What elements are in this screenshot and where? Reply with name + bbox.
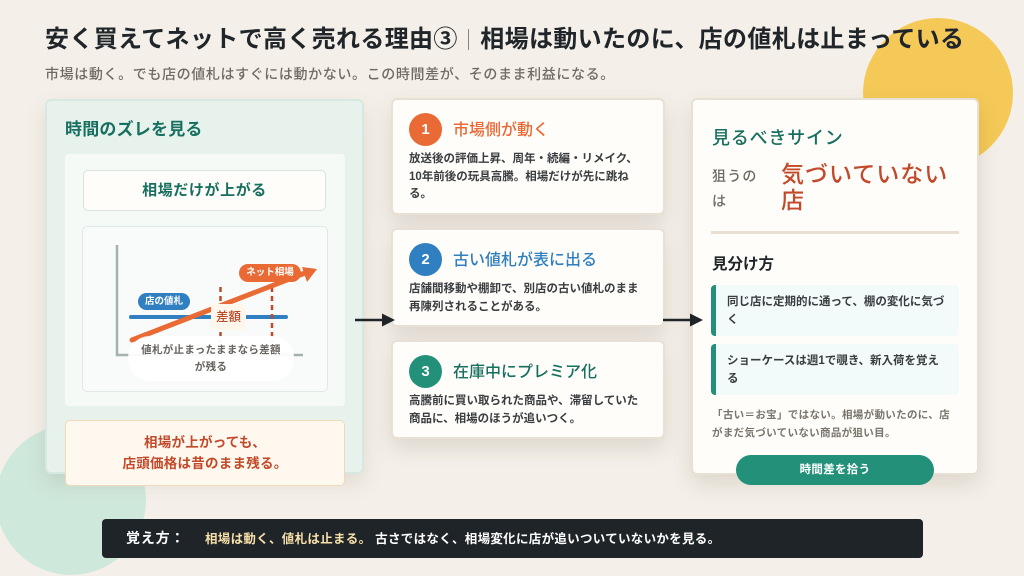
title: 安く買えてネットで高く売れる理由③ 相場は動いたのに、店の値札は止まっている bbox=[45, 26, 964, 53]
step 3 text bbox=[409, 394, 638, 424]
tip 2 text bbox=[727, 354, 939, 384]
step 2 text bbox=[409, 282, 639, 312]
card: step 2 bbox=[391, 228, 665, 327]
tip 1 text bbox=[727, 295, 944, 326]
bar message: 相場は動く、値札は止まる。 古さではなく、相場変化に店が追いついていないかを見る。 bbox=[205, 532, 720, 546]
target value: 気づいていない bbox=[781, 161, 948, 187]
number 1: 1 bbox=[421, 121, 430, 138]
step 3 text: 高騰前に買い取られた商品や、滞留していた bbox=[409, 395, 638, 407]
step 2 heading: 古い値札が表に出る bbox=[453, 252, 597, 269]
note: がまだ気づいていない商品が狙い目。 bbox=[712, 427, 896, 439]
gap dashed lines bbox=[220, 287, 272, 342]
gap label: 差額 bbox=[216, 310, 241, 324]
target label: 狙うの bbox=[712, 168, 758, 184]
callout: 店頭価格は昔のまま残る。 bbox=[122, 456, 288, 471]
number 3: 3 bbox=[421, 363, 430, 380]
pill: shop price: 店の値札 bbox=[145, 296, 183, 307]
step 1 text: 放送後の評価上昇、周年・続編・リメイク、 bbox=[409, 153, 638, 165]
subtitle: 市場は動く。でも店の値札はすぐには動かない。この時間差が、そのまま利益になる。 bbox=[45, 66, 615, 82]
panel: signs bbox=[691, 98, 979, 475]
shop price line bbox=[131, 315, 286, 319]
number 3 bbox=[409, 355, 442, 388]
target label: は bbox=[712, 193, 727, 209]
chart card bbox=[82, 226, 328, 392]
divider bbox=[711, 231, 959, 234]
decorative circle: green bbox=[0, 425, 146, 575]
step 1 heading: 市場側が動く bbox=[453, 122, 549, 139]
pill: shop price bbox=[138, 293, 190, 310]
market price arrow bbox=[132, 267, 317, 340]
how to spot heading: 見分け方 bbox=[712, 256, 774, 273]
label: market only rises: 相場だけが上がる bbox=[142, 182, 267, 199]
step 3 heading: 在庫中にプレミア化 bbox=[453, 364, 597, 381]
step 1 text: 10年前後の玩具高騰。相場だけが先に跳ね bbox=[409, 170, 629, 182]
chart caption bbox=[128, 336, 294, 381]
panel: time gap bbox=[45, 99, 364, 474]
callout: 相場が上がっても、 bbox=[144, 435, 266, 450]
button: 時間差を拾う bbox=[800, 464, 870, 476]
bottom bar bbox=[102, 519, 923, 558]
step 2 text: 店舗間移動や棚卸で、別店の古い値札のまま bbox=[409, 283, 639, 295]
chart caption: 値札が止まったままなら差額 bbox=[141, 344, 281, 356]
card: step 3 bbox=[391, 340, 665, 439]
step 1 text: る。 bbox=[409, 188, 432, 200]
decorative circle: yellow bbox=[863, 18, 1013, 168]
step 1 text bbox=[409, 152, 638, 200]
target value: 店 bbox=[781, 187, 805, 213]
target value bbox=[781, 161, 948, 213]
tip 2 text: ショーケースは週1で覗き、新入荷を覚え bbox=[727, 355, 939, 367]
tip 1 text: 同じ店に定期的に通って、棚の変化に気づ bbox=[727, 296, 944, 308]
inner panel bbox=[65, 154, 345, 406]
arrow: left to centre bbox=[355, 314, 395, 326]
step 3 text: 商品に、相場のほうが追いつく。 bbox=[409, 412, 581, 424]
tip 1 bbox=[711, 285, 959, 336]
label: market only rises bbox=[83, 170, 326, 211]
button bbox=[736, 455, 934, 485]
number 2: 2 bbox=[421, 251, 430, 268]
number 1 bbox=[409, 113, 442, 146]
panel heading: 時間のズレを見る bbox=[65, 120, 203, 139]
pill: net market price bbox=[239, 264, 301, 282]
tip 2 text: る bbox=[727, 372, 738, 384]
signs heading: 見るべきサイン bbox=[712, 128, 844, 148]
target label bbox=[712, 168, 758, 209]
tip 2 bbox=[711, 344, 959, 395]
bar label: 覚え方： bbox=[126, 530, 185, 546]
note bbox=[712, 408, 950, 439]
note: 「古い＝お宝」ではない。相場が動いたのに、店 bbox=[712, 409, 950, 421]
chart caption: が残る bbox=[195, 361, 227, 373]
step 2 text: 再陳列されることがある。 bbox=[409, 300, 547, 312]
axes bbox=[117, 245, 303, 355]
tip 1 text: く bbox=[727, 314, 738, 326]
pill: net market price: ネット相場 bbox=[246, 267, 294, 278]
gap label bbox=[211, 304, 246, 330]
callout bbox=[65, 420, 345, 486]
card: step 1 bbox=[391, 98, 665, 215]
arrow: centre to right bbox=[663, 314, 703, 326]
number 2 bbox=[409, 243, 442, 276]
